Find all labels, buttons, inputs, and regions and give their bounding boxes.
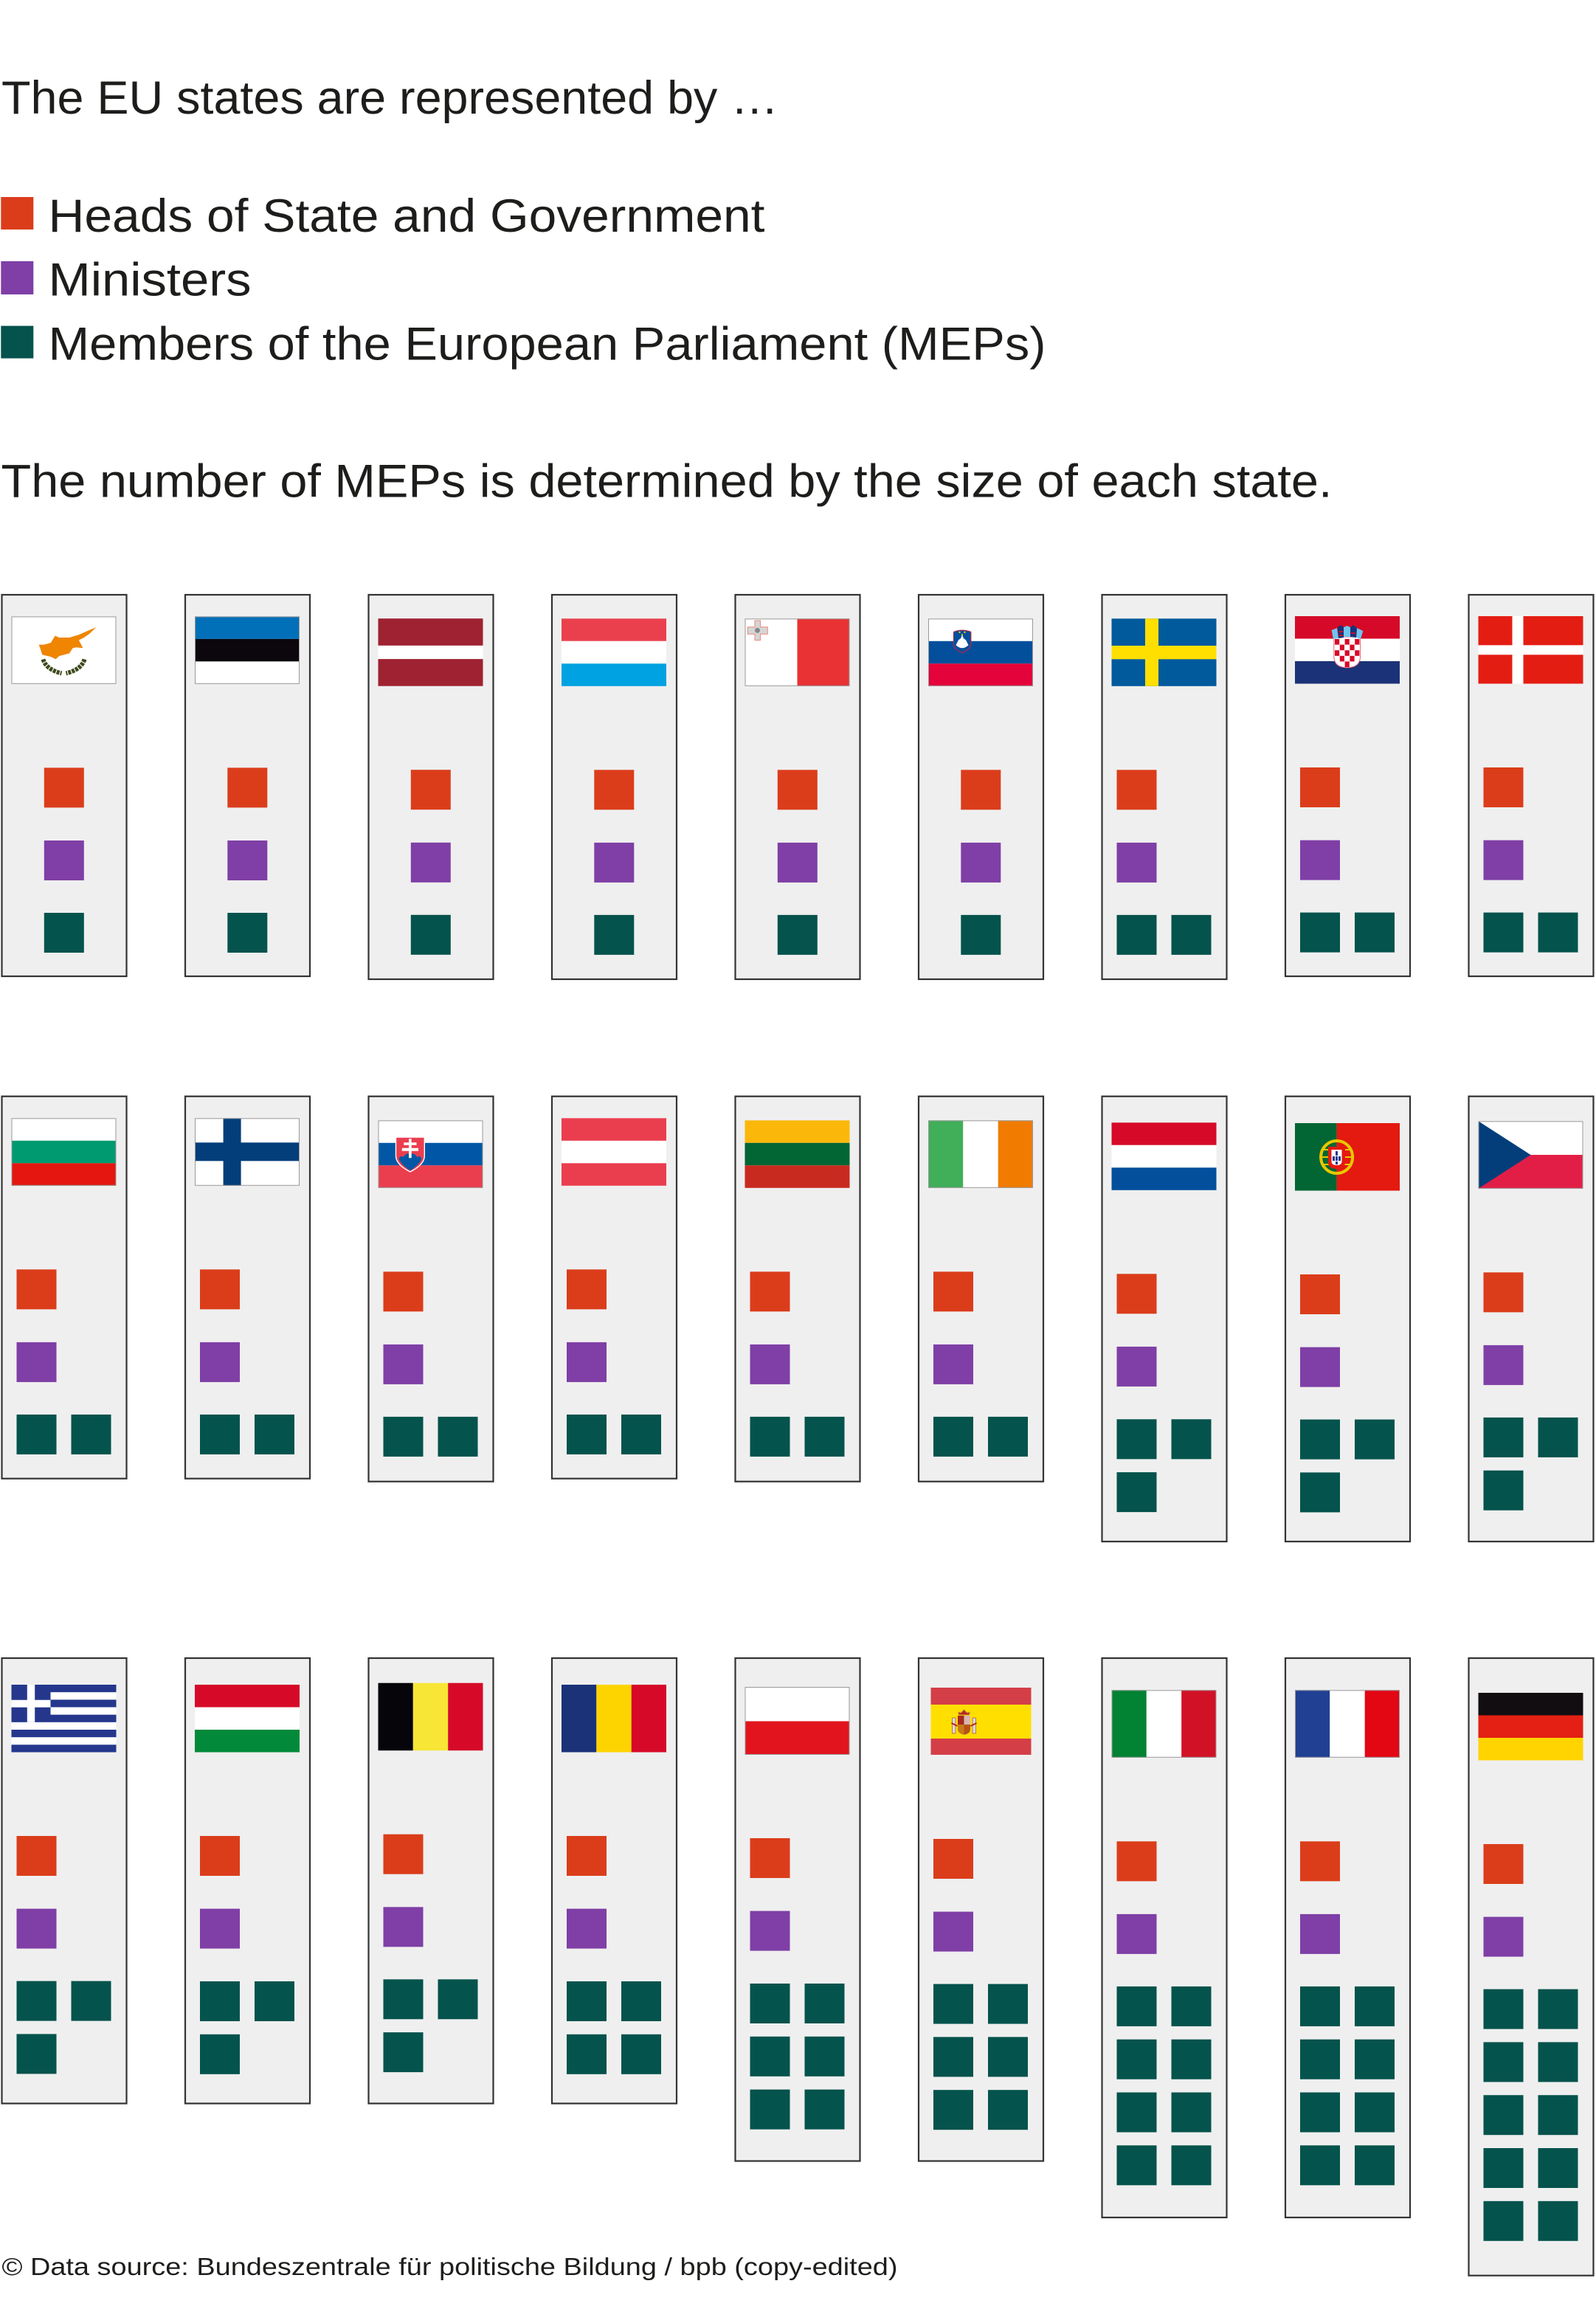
flag: Latvia (378, 618, 483, 686)
minister square (933, 1912, 973, 1952)
flag: Hungary (195, 1685, 300, 1752)
head of state square (1117, 1274, 1157, 1314)
MEP squares (750, 1984, 844, 2130)
head of state square (1300, 1841, 1340, 1881)
MEP squares (16, 1981, 111, 2074)
panel: Sweden (1102, 595, 1226, 979)
minister square (750, 1911, 790, 1951)
head of state square (44, 767, 84, 807)
head of state square (961, 770, 1001, 810)
panel: France (1285, 1658, 1410, 2217)
head of state square (227, 767, 267, 807)
flag: Poland (745, 1687, 850, 1755)
legend label: ministers: Ministers (49, 254, 251, 306)
flag: Luxembourg (562, 618, 666, 686)
minister square (384, 1907, 424, 1947)
head of state square (200, 1836, 240, 1876)
minister square (1483, 1345, 1523, 1385)
MEP squares (567, 1415, 661, 1454)
minister square (411, 843, 451, 883)
minister square (567, 1909, 607, 1949)
MEP squares (384, 1979, 478, 2072)
head of state square (384, 1271, 424, 1311)
head of state square (933, 1839, 973, 1879)
minister square (384, 1345, 424, 1384)
head of state square (750, 1271, 790, 1311)
minister square (16, 1342, 56, 1382)
minister square (44, 841, 84, 880)
MEP squares (1117, 1419, 1212, 1512)
data source footer: © Data source: Bundeszentrale für politische Bildung / bpb (copy-edited) (1, 2253, 897, 2280)
explanatory sentence: The number of MEPs is determined by the size of each state. (1, 456, 1332, 508)
MEP squares (200, 1981, 294, 2074)
heading: The EU states are represented by … (1, 72, 778, 124)
minister square (1300, 1347, 1340, 1387)
MEP squares (227, 913, 267, 953)
MEP squares (16, 1415, 111, 1454)
panel: Latvia (369, 595, 493, 979)
legend label: heads of state: Heads of State and Government (49, 190, 765, 242)
MEP squares (1483, 1989, 1578, 2241)
flag: Portugal (1295, 1123, 1400, 1191)
MEP squares (44, 913, 84, 953)
flag: Italy (1111, 1690, 1216, 1758)
panel: Romania (552, 1658, 677, 2103)
panel: Netherlands (1102, 1097, 1226, 1542)
panel: Slovenia (919, 595, 1043, 979)
flag: Malta (745, 618, 850, 686)
MEP squares (1117, 1987, 1212, 2185)
head of state square (1300, 767, 1340, 807)
flag: Croatia (1295, 616, 1400, 683)
legend (1, 190, 1046, 370)
MEP squares (200, 1415, 294, 1454)
panel: Spain (919, 1658, 1043, 2161)
minister square (1483, 841, 1523, 880)
flag: Greece (12, 1685, 117, 1752)
minister square (961, 843, 1001, 883)
flag: Netherlands (1111, 1122, 1216, 1190)
MEP squares (1117, 915, 1212, 955)
minister square (227, 841, 267, 880)
panel: Greece (1, 1658, 127, 2103)
flag: Czech Republic (1479, 1121, 1583, 1189)
minister square (200, 1909, 240, 1949)
MEP squares (933, 1984, 1028, 2130)
head of state square (567, 1836, 607, 1876)
head of state square (1117, 770, 1157, 810)
flag: Spain (931, 1688, 1032, 1755)
minister square (200, 1342, 240, 1382)
flag: Bulgaria (12, 1118, 117, 1186)
panel: Czech Republic (1468, 1097, 1594, 1542)
legend label: MEPs: Members of the European Parliament (MEPs) (49, 319, 1046, 370)
panel: Cyprus (1, 595, 127, 976)
legend swatch: heads of state (1, 197, 33, 229)
flag: Cyprus (12, 616, 117, 684)
flag: Austria (562, 1118, 666, 1186)
panel: Germany (1468, 1658, 1594, 2276)
MEP squares (1300, 913, 1395, 953)
flag: Denmark (1479, 616, 1583, 683)
MEP squares (567, 1981, 661, 2074)
panel: Slovakia (369, 1097, 493, 1482)
MEP squares (1483, 1418, 1578, 1511)
minister square (1300, 1914, 1340, 1954)
head of state square (16, 1269, 56, 1309)
head of state square (1300, 1274, 1340, 1314)
MEP squares (1300, 1420, 1395, 1512)
minister square (1117, 1347, 1157, 1387)
panel: Italy (1102, 1658, 1226, 2217)
MEP squares (411, 915, 451, 955)
flag: Finland (195, 1118, 300, 1186)
MEP squares (750, 1417, 844, 1457)
legend swatch: MEPs (1, 326, 33, 359)
minister square (1117, 843, 1157, 883)
panel: Croatia (1285, 595, 1410, 976)
flag: Slovenia (928, 618, 1033, 686)
head of state square (384, 1834, 424, 1874)
MEP squares (961, 915, 1001, 955)
head of state square (594, 770, 634, 810)
minister square (16, 1909, 56, 1949)
panel: Bulgaria (1, 1097, 127, 1479)
head of state square (1483, 1844, 1523, 1884)
panel: Estonia (185, 595, 310, 976)
panel: Ireland (919, 1097, 1043, 1482)
flag: Romania (562, 1685, 666, 1752)
flag: Estonia (195, 616, 300, 684)
flag: Slovakia (378, 1120, 483, 1188)
MEP squares (1483, 913, 1578, 953)
panel: Lithuania (735, 1097, 860, 1482)
head of state square (750, 1838, 790, 1878)
panel: Austria (552, 1097, 677, 1479)
panel: Finland (185, 1097, 310, 1479)
minister square (1117, 1914, 1157, 1954)
flag: Belgium (378, 1683, 483, 1750)
MEP squares (384, 1417, 478, 1457)
panel: Belgium (369, 1658, 493, 2103)
minister square (1300, 841, 1340, 880)
head of state square (200, 1269, 240, 1309)
panel: Hungary (185, 1658, 310, 2103)
MEP squares (933, 1417, 1028, 1457)
head of state square (411, 770, 451, 810)
MEP squares (594, 915, 634, 955)
minister square (567, 1342, 607, 1382)
panel: Malta (735, 595, 860, 979)
panel: Luxembourg (552, 595, 677, 979)
minister square (1483, 1917, 1523, 1957)
panel: Portugal (1285, 1097, 1410, 1542)
flag: France (1295, 1690, 1400, 1758)
flag: Lithuania (745, 1120, 850, 1188)
flag: Ireland (928, 1120, 1033, 1188)
minister square (750, 1345, 790, 1384)
minister square (933, 1345, 973, 1384)
head of state square (567, 1269, 607, 1309)
legend swatch: ministers (1, 261, 33, 294)
flag: Sweden (1111, 618, 1216, 686)
minister square (778, 843, 818, 883)
MEP squares (778, 915, 818, 955)
head of state square (16, 1836, 56, 1876)
head of state square (1117, 1841, 1157, 1881)
flag: Germany (1479, 1693, 1583, 1761)
panel: Denmark (1468, 595, 1594, 976)
head of state square (1483, 1272, 1523, 1312)
head of state square (778, 770, 818, 810)
head of state square (1483, 767, 1523, 807)
MEP squares (1300, 1987, 1395, 2185)
panel: Poland (735, 1658, 860, 2161)
minister square (594, 843, 634, 883)
head of state square (933, 1271, 973, 1311)
